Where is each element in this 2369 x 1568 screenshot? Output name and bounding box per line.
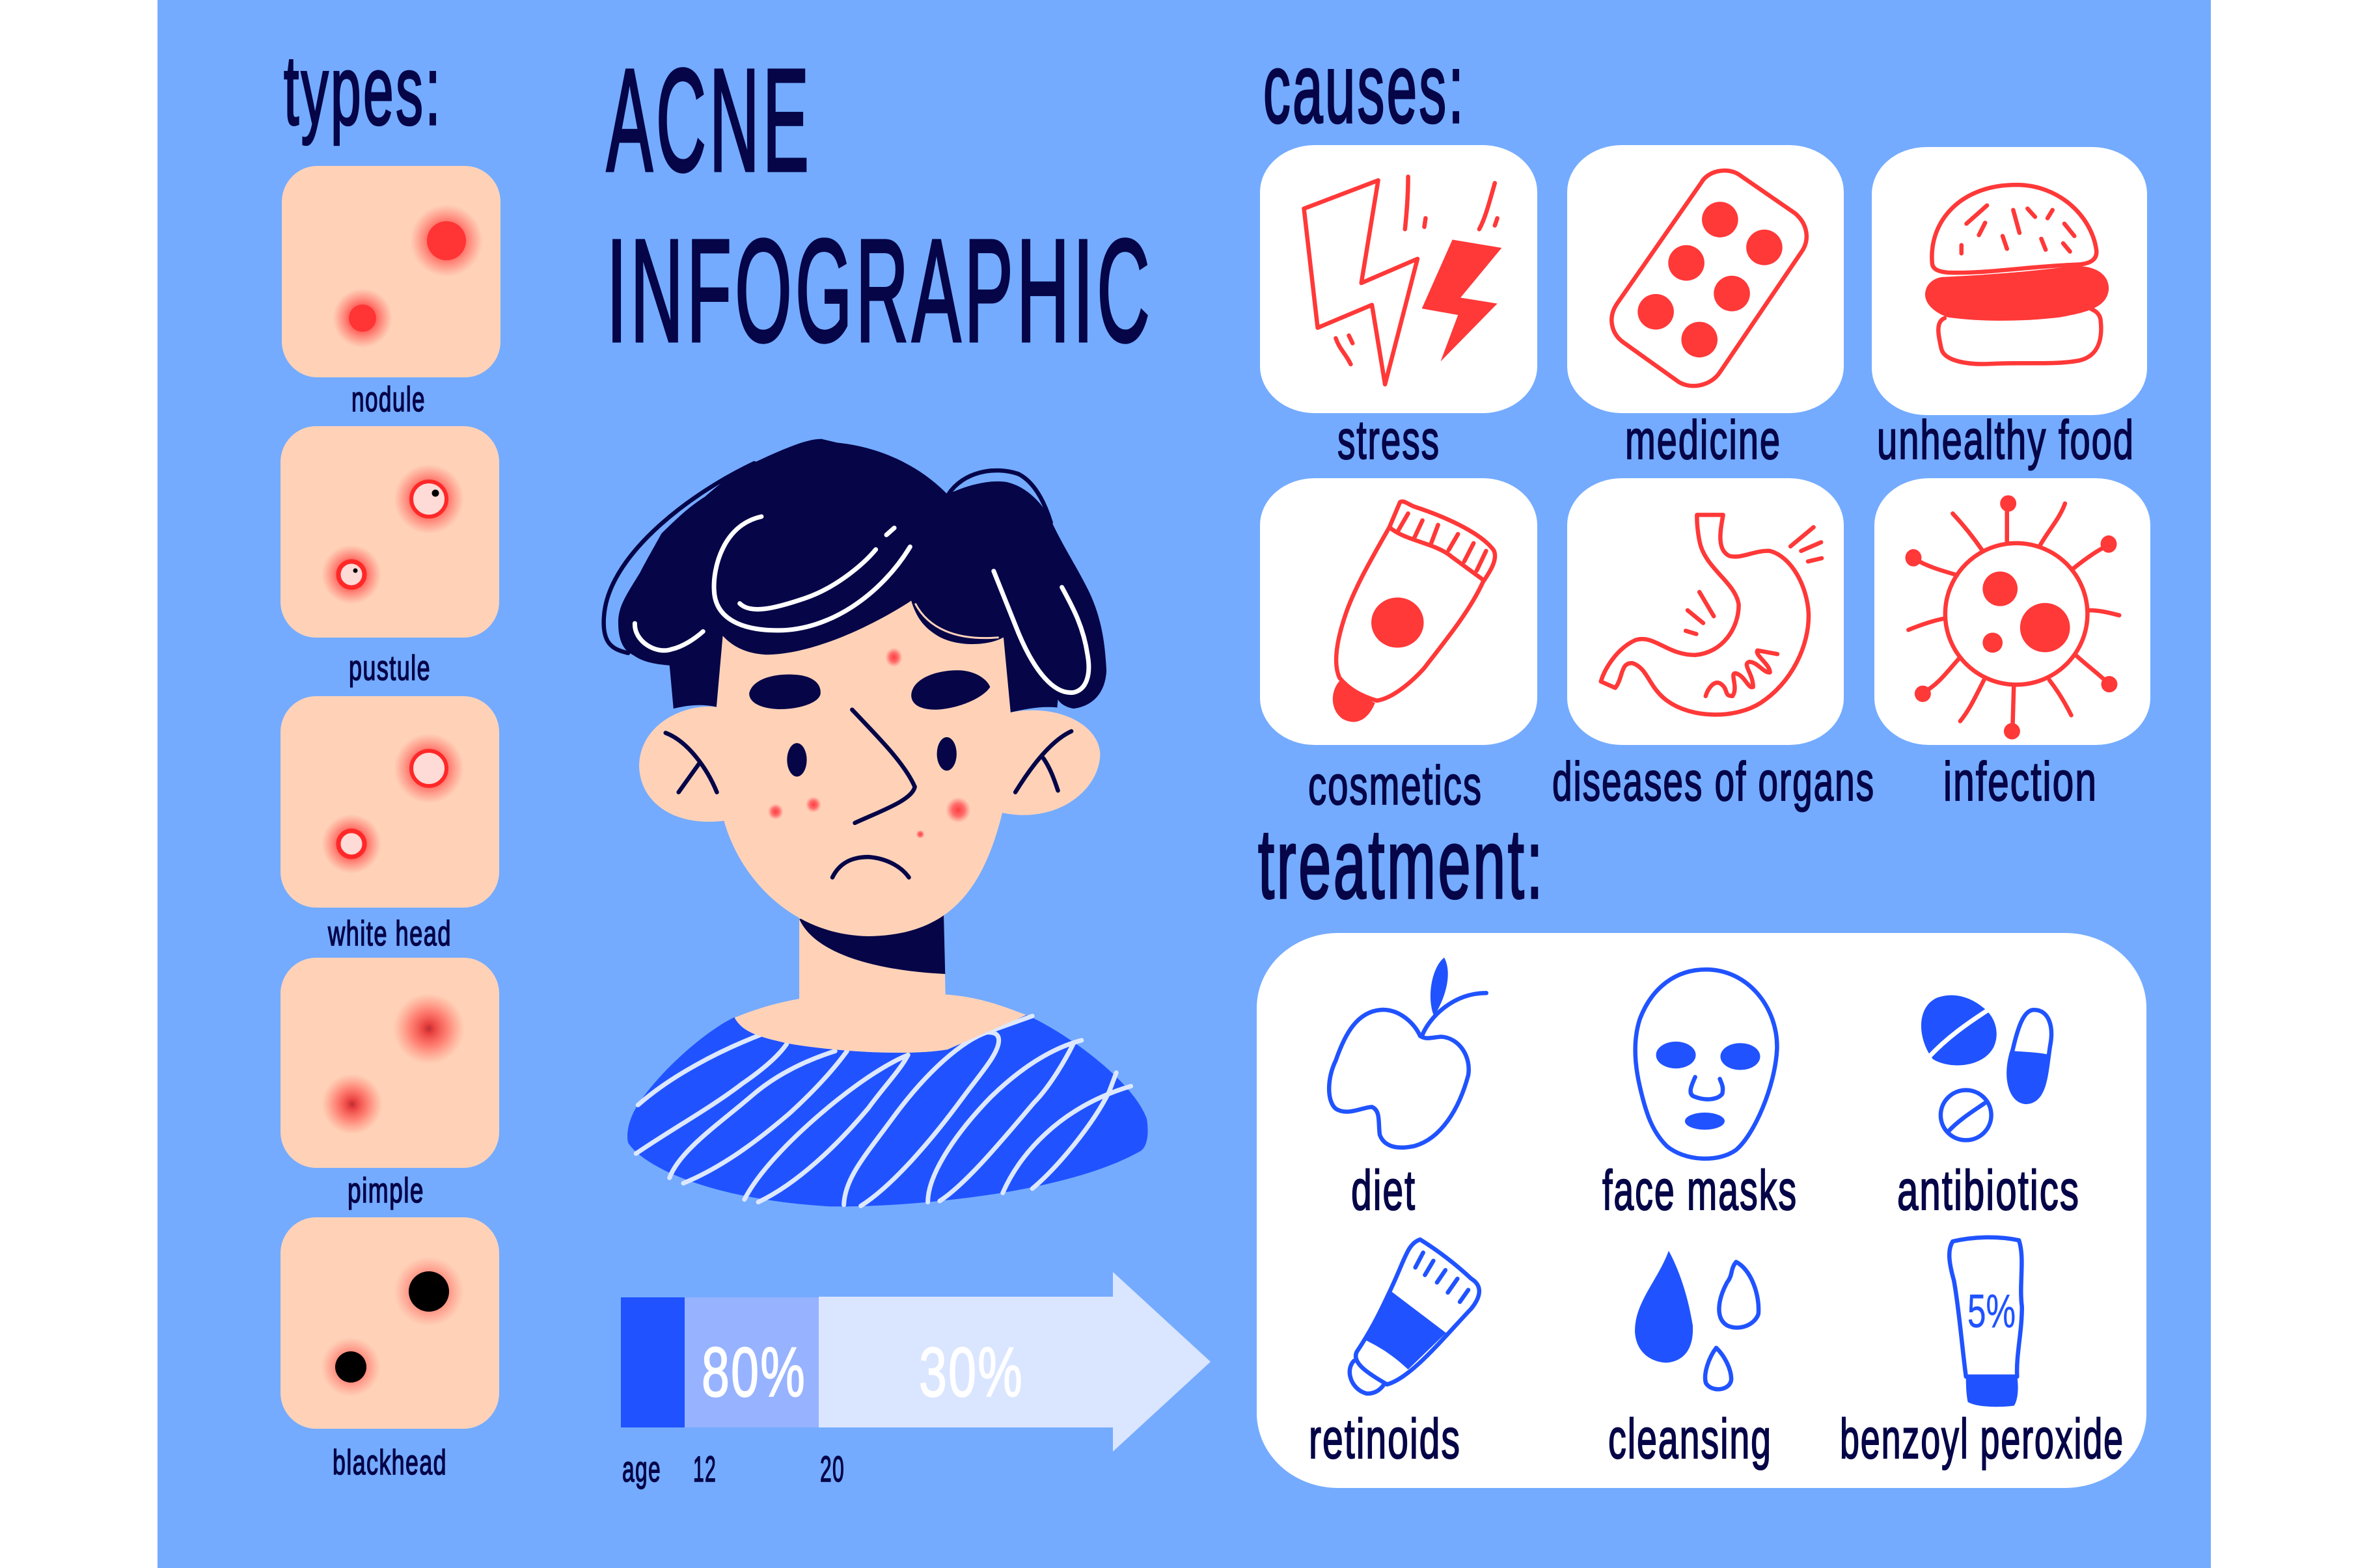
shirt [627, 1015, 1148, 1206]
icon: cleansing drops [1635, 1250, 1759, 1389]
neck shadow [799, 908, 945, 974]
bottle label: 5 percent: 5% [1967, 1286, 2016, 1338]
treatment labels [1309, 1159, 2124, 1470]
icon: burger [1925, 185, 2109, 364]
cause card backgrounds [1260, 145, 2150, 745]
neck [799, 903, 946, 1003]
title: ACNE [607, 39, 812, 202]
treatment labels: retinoids [1309, 1408, 1461, 1470]
axis labels: 20 [820, 1448, 845, 1489]
face [717, 595, 1011, 936]
treatment labels: diet [1351, 1159, 1416, 1222]
collar skin [735, 994, 1026, 1053]
character: teen with acne [604, 439, 1148, 1206]
cause labels: diseases of organs [1552, 751, 1875, 812]
type card: white head [281, 696, 499, 953]
type card: pimple: pimple [348, 1171, 424, 1210]
icon: retinoid tube [1350, 1239, 1479, 1394]
icon: medicine blister [1611, 170, 1807, 386]
panel: acne types [281, 166, 500, 1482]
type card: pimple [281, 958, 499, 1210]
treatment panel background [1257, 933, 2146, 1488]
title [607, 39, 1153, 372]
bar: 80 percent segment [685, 1297, 819, 1427]
cause labels: infection [1943, 751, 2098, 812]
age prevalence arrow [621, 1272, 1211, 1489]
type card: nodule [282, 166, 500, 419]
arrow: 30 percent segment [819, 1272, 1211, 1452]
icon group: causes icons [1304, 170, 2119, 740]
title: INFOGRAPHIC [607, 210, 1153, 372]
icon: apple [1329, 958, 1486, 1148]
panel: treatment [1257, 933, 2146, 1488]
type card: blackhead [281, 1217, 499, 1482]
heading: treatment: treatment: [1258, 809, 1545, 919]
ears [639, 707, 1100, 822]
panel: causes [1260, 145, 2150, 816]
icon group: treatment icons [1329, 958, 2051, 1407]
axis labels: age [622, 1448, 661, 1489]
cause labels: medicine [1625, 409, 1781, 470]
acne spots [768, 647, 971, 839]
cause labels [1308, 409, 2135, 816]
treatment labels: benzoyl peroxide [1840, 1408, 2124, 1470]
cause labels: stress [1337, 409, 1440, 470]
type card: pustule: pustule [349, 649, 431, 688]
icon: antibiotic pills [1921, 995, 2051, 1140]
type card: nodule: nodule [351, 380, 426, 419]
type card: blackhead: blackhead [333, 1443, 447, 1482]
icon: stomach [1601, 515, 1822, 714]
icon: infection virus [1906, 495, 2119, 740]
heading: types: types: [284, 35, 443, 146]
cause labels: cosmetics [1308, 755, 1483, 816]
type card: pustule [281, 426, 499, 688]
cause labels: unhealthy food [1877, 409, 2135, 470]
icon: benzoyl peroxide bottle [1949, 1237, 2022, 1407]
type card: white head: white head [327, 914, 452, 953]
value: 80 percent: 80% [702, 1332, 806, 1411]
hair [604, 439, 1106, 712]
treatment labels: antibiotics [1897, 1159, 2080, 1222]
axis labels [622, 1448, 845, 1489]
treatment labels: face masks [1602, 1159, 1798, 1222]
bar: under 12 [621, 1297, 685, 1427]
axis labels: 12 [693, 1448, 717, 1489]
icon: face mask [1636, 969, 1777, 1159]
icon: stress lightning [1304, 177, 1501, 385]
treatment labels: cleansing [1608, 1408, 1772, 1470]
icon: cosmetics tube [1333, 502, 1495, 722]
heading: causes: causes: [1263, 33, 1466, 144]
value: 30 percent: 30% [919, 1332, 1024, 1411]
facial features [749, 670, 990, 878]
